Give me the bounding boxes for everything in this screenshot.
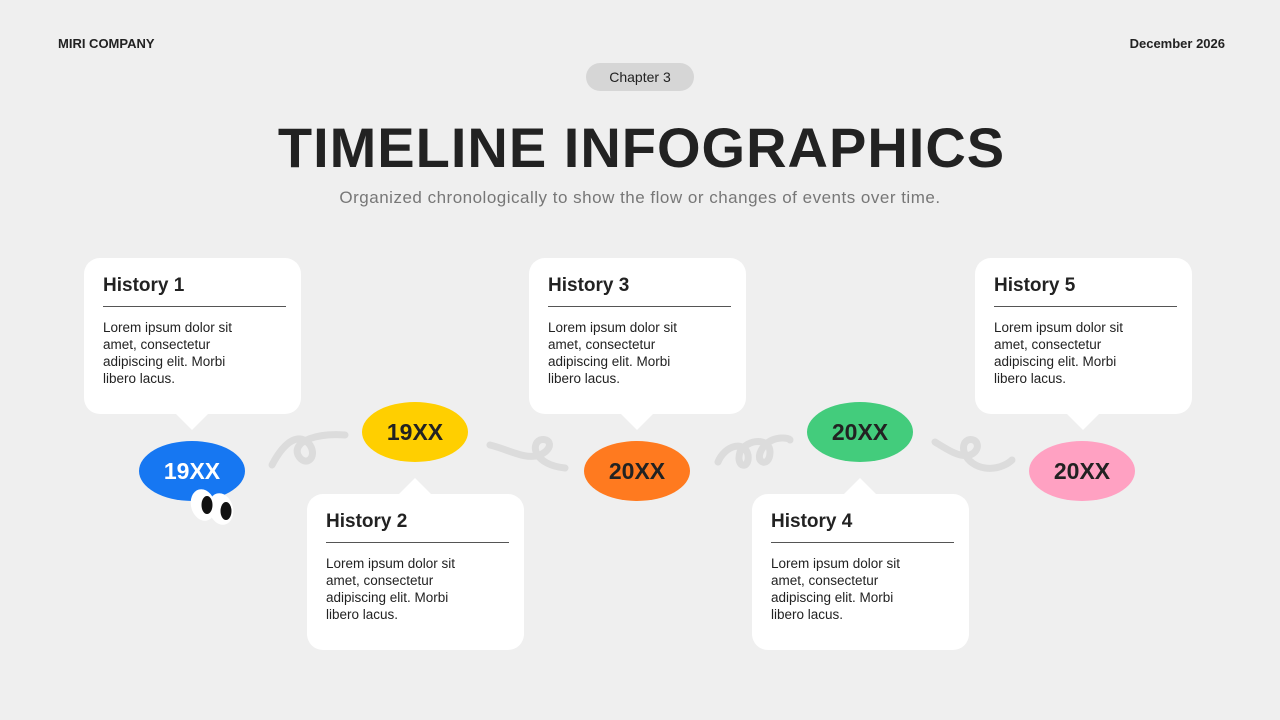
year: green: [807, 402, 913, 462]
card: History 5: History 5: [994, 275, 1075, 296]
card: History 4: History 4: [771, 511, 852, 532]
card: History 3: Lorem ipsum dolor sit amet, consectetur adipiscing elit. Morbi libero lacus.: [548, 320, 677, 386]
date: December 2026: [1130, 36, 1225, 51]
year: pink: [1029, 441, 1135, 501]
chapter pill: [586, 63, 694, 91]
card: History 2: History 2: [326, 511, 407, 532]
card: History 1: Lorem ipsum dolor sit amet, consectetur adipiscing elit. Morbi libero lacus.: [103, 320, 232, 386]
card: History 2: Lorem ipsum dolor sit amet, consectetur adipiscing elit. Morbi libero lacus.: [326, 556, 455, 622]
card: History 5: Lorem ipsum dolor sit amet, consectetur adipiscing elit. Morbi libero lacus.: [994, 320, 1123, 386]
year: orange: [584, 441, 690, 501]
year: orange: 20XX: [609, 458, 665, 484]
title: TIMELINE INFOGRAPHICS: [278, 116, 1005, 179]
card: History 1: [84, 258, 301, 414]
year: yellow: 19XX: [387, 418, 443, 444]
card: History 5: [975, 258, 1192, 414]
card: History 1: History 1: [103, 275, 184, 296]
year: pink: 20XX: [1054, 458, 1110, 484]
year: green: 20XX: [832, 418, 888, 444]
card: History 2: [307, 494, 524, 650]
card: History 4: [752, 494, 969, 650]
year: yellow: [362, 402, 468, 462]
company name: MIRI COMPANY: [58, 36, 155, 51]
chapter pill: Chapter 3: [609, 69, 671, 85]
subtitle: Organized chronologically to show the flow or changes of events over time.: [339, 188, 941, 207]
year: blue: [139, 441, 245, 501]
card: History 3: [529, 258, 746, 414]
card: History 3: History 3: [548, 275, 629, 296]
icon: eyes: [190, 489, 234, 524]
year: blue: 19XX: [164, 458, 220, 484]
card: History 4: Lorem ipsum dolor sit amet, consectetur adipiscing elit. Morbi libero lacus.: [771, 556, 900, 622]
